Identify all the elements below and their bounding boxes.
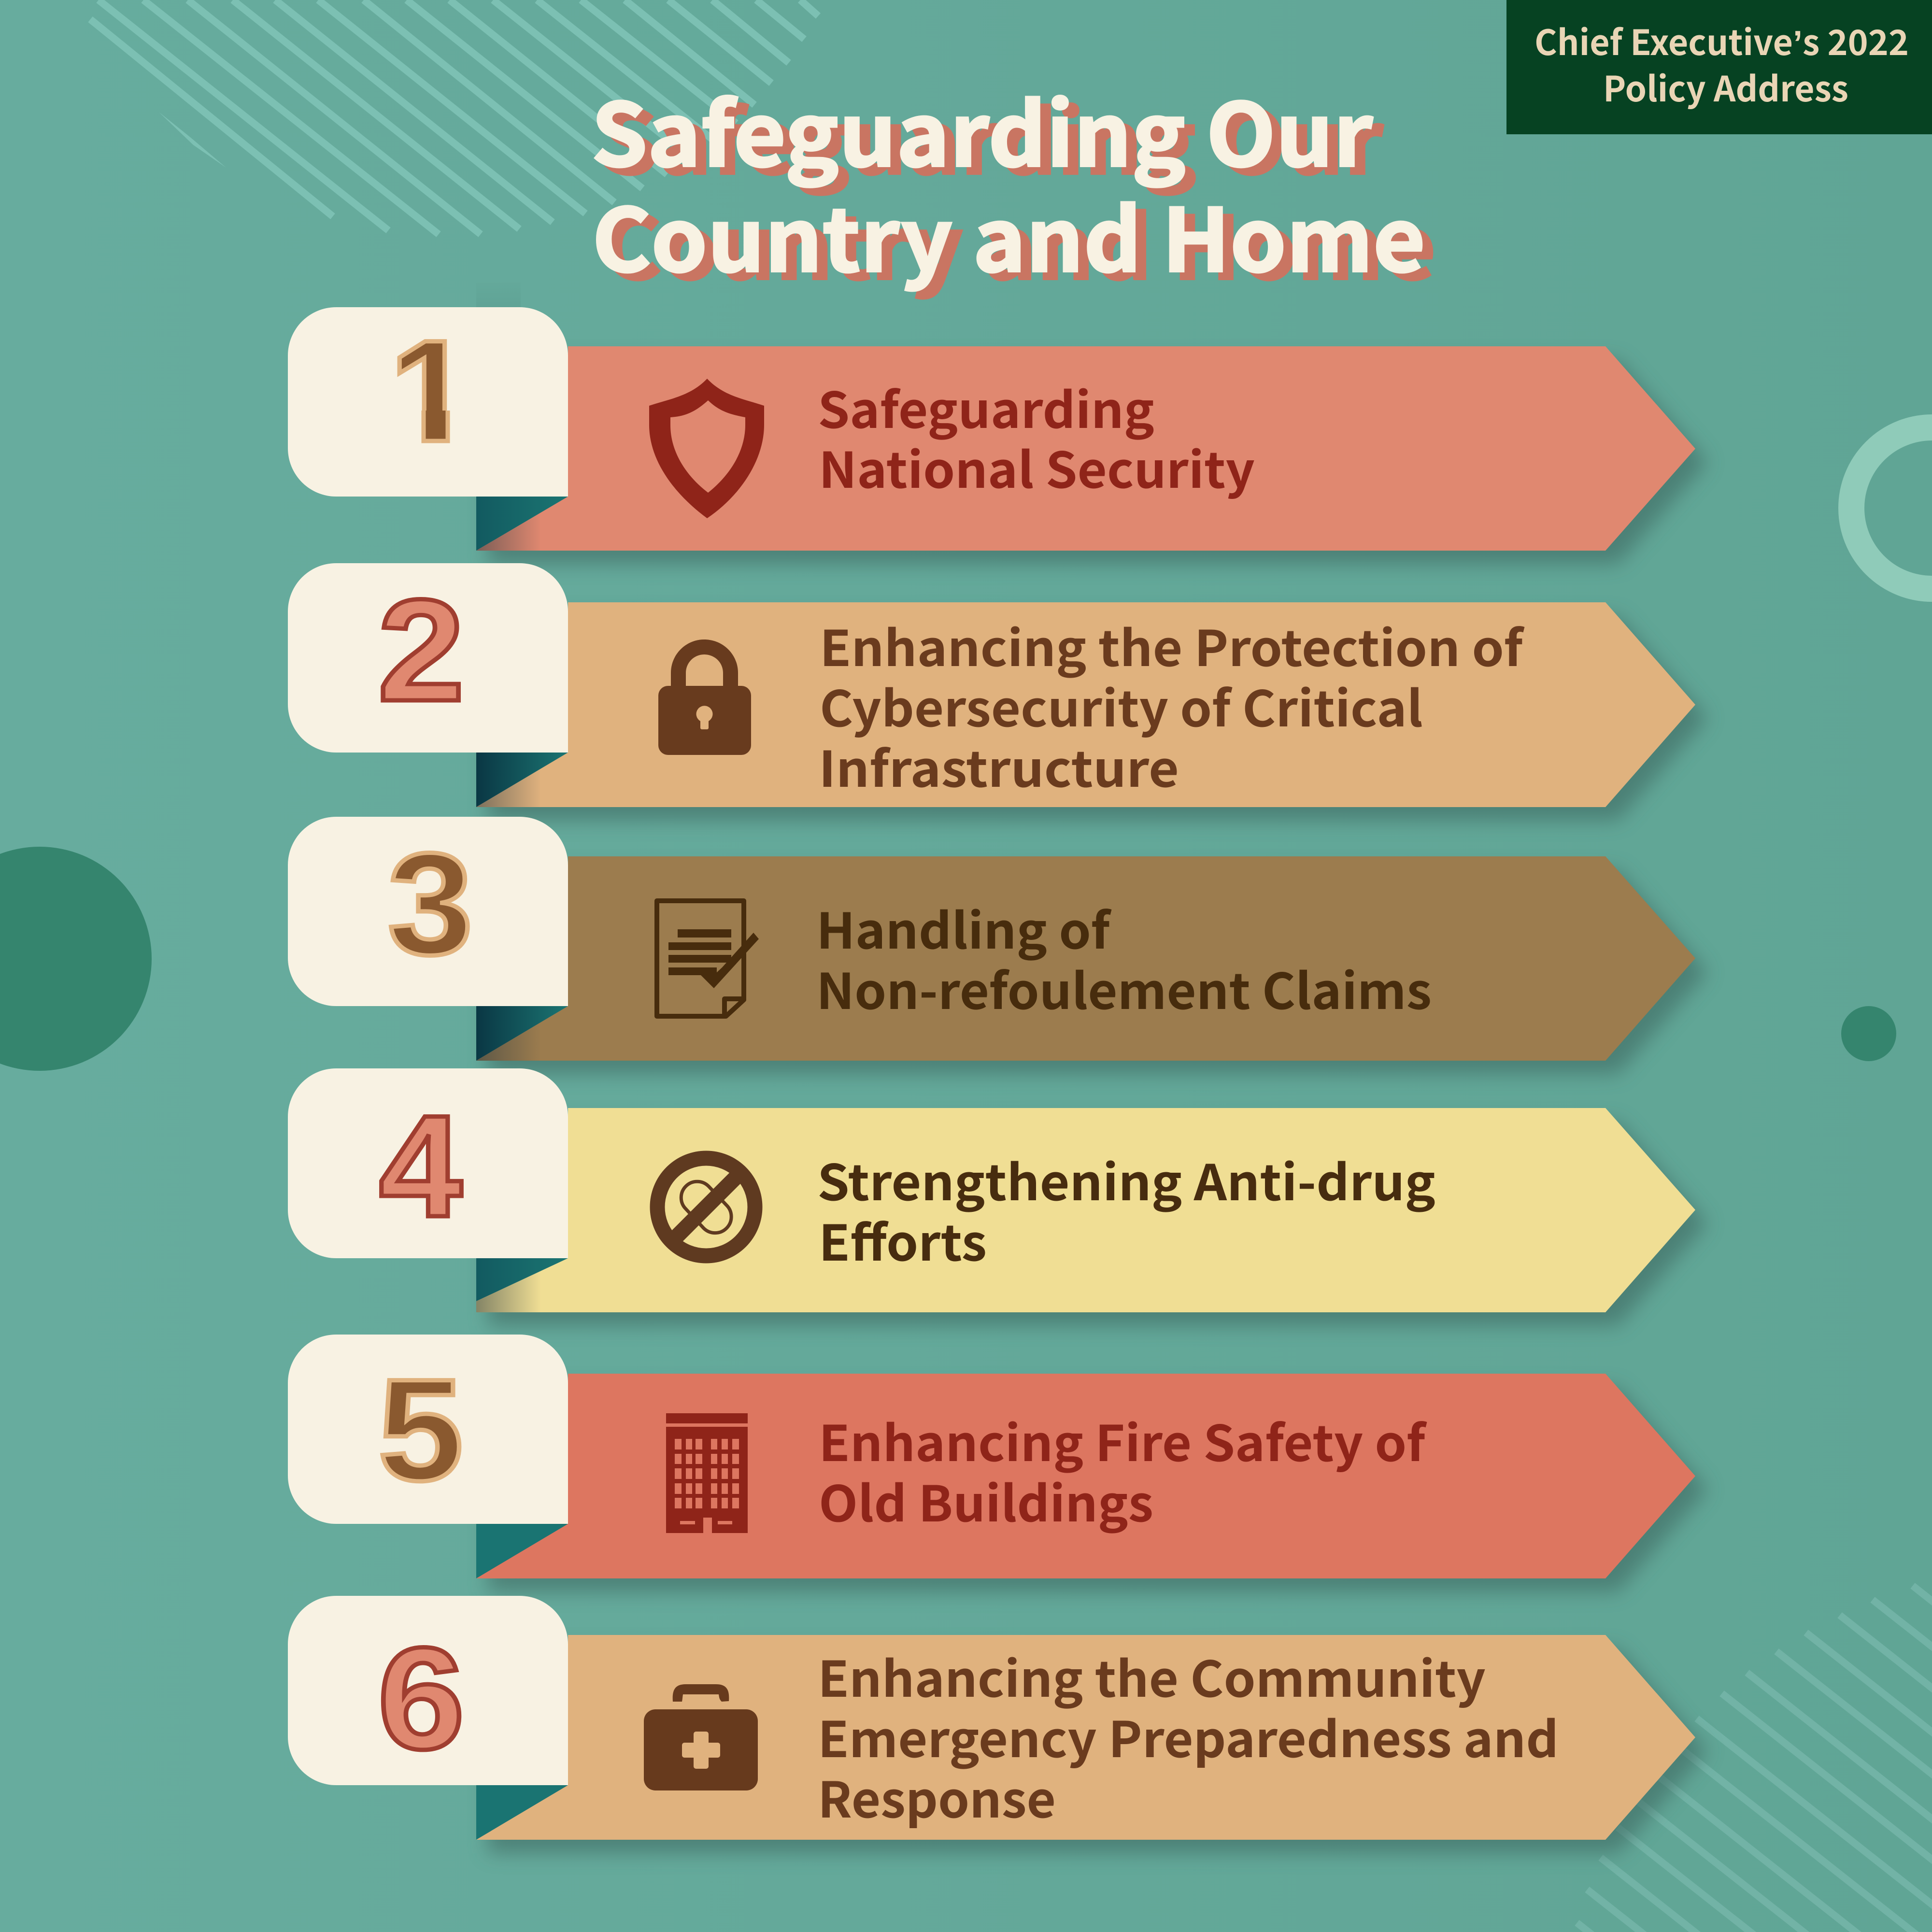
label: Enhancing Fire Safety of [819,1405,1427,1476]
label: Infrastructure [819,730,1179,801]
decorative ring: right [1851,427,1932,589]
label: Non-refoulement Claims [816,952,1432,1023]
number 6: 6 [378,1618,465,1779]
item 3: Handling of Non-refoulement Claims [288,817,1707,1074]
label: Emergency Preparedness and [818,1701,1559,1772]
title: Safeguarding Our [591,65,1373,191]
title: Country and Home [592,170,1425,297]
label: Enhancing the Community [818,1640,1486,1711]
icon: no drugs [657,1158,755,1256]
title: Safeguarding Our [602,73,1384,199]
badge: Chief Executive's 2022 Policy Address: Policy Address [1603,61,1848,112]
label [818,371,1255,502]
icon: signed document [657,901,759,1016]
title: Country and Home [603,178,1436,304]
icon: padlock [658,639,751,755]
label: Enhancing the Protection of [820,610,1525,681]
decorative large circle: left [0,847,152,1071]
number 2: 2 [378,569,465,731]
item 5: Enhancing Fire Safety of Old Buildings [288,1335,1707,1592]
label: Efforts [819,1204,987,1275]
label [818,1640,1559,1832]
faint strip above first card [476,283,521,307]
label: Old Buildings [819,1465,1153,1536]
label [817,1144,1435,1275]
label [819,610,1525,801]
label [816,892,1432,1023]
icon: shield [649,379,764,518]
label: Safeguarding [818,371,1154,442]
item 1: Safeguarding National Security [288,307,1707,564]
number 1: 1 [389,310,472,472]
title [591,65,1436,304]
icon: first aid kit [644,1684,758,1790]
badge: Chief Executive's 2022 Policy Address: Chief Executive’s 2022 [1534,14,1909,65]
decorative small circle: right [1841,1006,1896,1061]
number 5: 5 [378,1349,463,1511]
number 4: 4 [379,1085,463,1247]
label: Strengthening Anti-drug [817,1144,1435,1215]
number 3: 3 [388,823,473,985]
icon: building [666,1413,748,1533]
label: Cybersecurity of Critical [820,670,1423,741]
item 6: Enhancing the Community Emergency Preparedness and Response [288,1596,1707,1853]
decorative stripes: top left [90,0,818,234]
decorative stripes: bottom right [1577,1586,1932,1932]
label: Response [818,1761,1056,1832]
label: Handling of [816,892,1112,963]
item 4: Strengthening Anti-drug Efforts [288,1068,1707,1326]
badge: Chief Executive's 2022 Policy Address [1506,0,1932,134]
label: National Security [819,431,1255,502]
label [819,1405,1427,1536]
item 2: Enhancing the Protection of Cybersecurity of Critical Infrastructure [288,563,1707,821]
